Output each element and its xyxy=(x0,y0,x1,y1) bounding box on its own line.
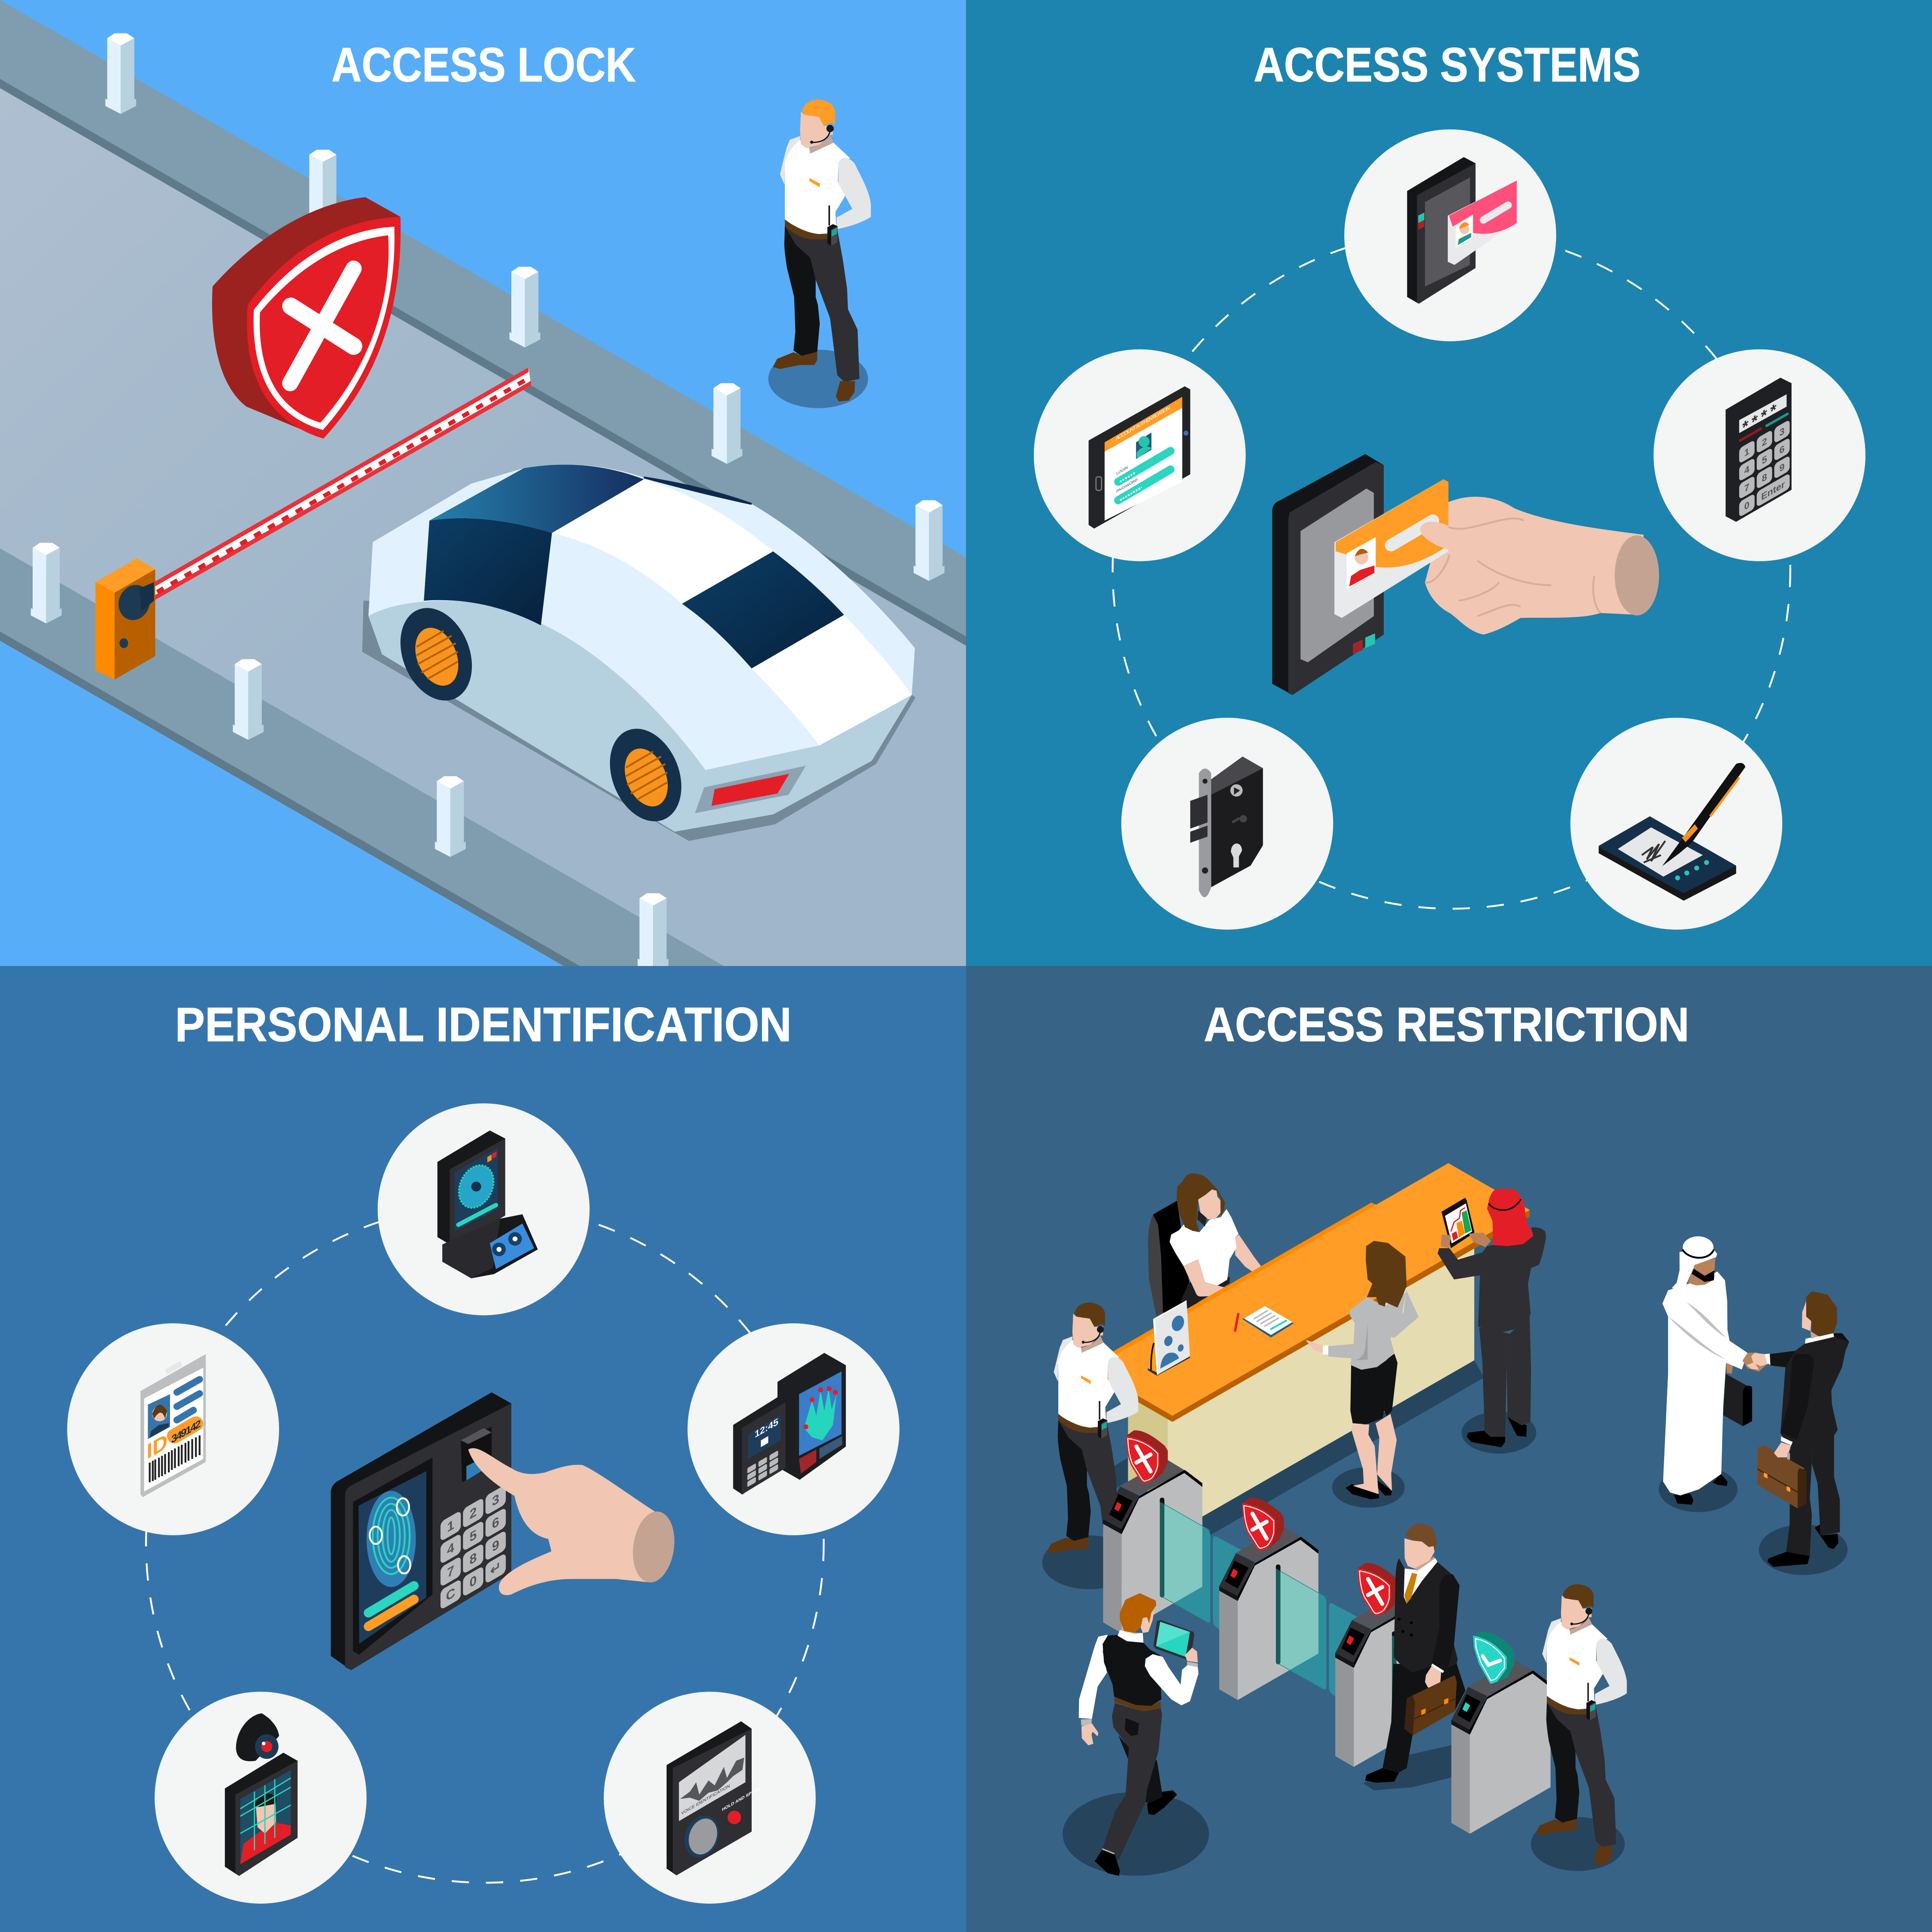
circle: tablet login xyxy=(1034,349,1245,561)
wheels xyxy=(387,597,695,832)
center fingerprint terminal with hand: 1 xyxy=(447,1517,454,1535)
man with briefcase xyxy=(1364,1524,1465,1790)
circle: voice recognition: VOICE IDENTIFICATION xyxy=(681,1783,730,1816)
circle: tablet login: PASSWORD xyxy=(1116,477,1138,494)
receptionist xyxy=(1148,1173,1264,1316)
man with tablet xyxy=(1063,1593,1209,1876)
circle: keypad: **** xyxy=(1742,398,1780,437)
turnstile 4 with green shield xyxy=(1451,1631,1550,1834)
circle: hand scanner: 12:45 xyxy=(755,1416,778,1440)
center fingerprint terminal with hand xyxy=(331,1392,679,1670)
panel: access lock xyxy=(0,0,966,974)
turnstile 1 xyxy=(1103,1459,1210,1633)
circle: door lock xyxy=(1121,718,1333,930)
title: ACCESS SYSTEMS xyxy=(1254,38,1640,91)
center fingerprint terminal with hand: 5 xyxy=(470,1527,477,1545)
guard xyxy=(768,100,871,408)
barrier gate xyxy=(95,367,531,680)
circle: keypad: 4 xyxy=(1744,463,1750,477)
turnstile 3 xyxy=(1329,1593,1434,1767)
circle: signature tablet xyxy=(1571,718,1782,930)
circle: id badge xyxy=(67,1323,279,1535)
title: ACCESS RESTRICTION xyxy=(1204,998,1689,1051)
circle: keypad: 5 xyxy=(1762,453,1767,466)
bollards xyxy=(31,33,945,974)
center fingerprint terminal with hand: 0 xyxy=(470,1572,477,1591)
road with kerbs xyxy=(0,0,966,966)
guard near desk xyxy=(1042,1303,1138,1589)
circle: keypad: 8 xyxy=(1762,471,1767,484)
center fingerprint terminal with hand: 4 xyxy=(447,1540,454,1558)
circle: iris scanner xyxy=(378,1103,589,1315)
shields on turnstiles xyxy=(1126,1430,1400,1616)
circle: keypad: 0 xyxy=(1744,499,1750,512)
desk sign and papers xyxy=(1148,1300,1294,1376)
center fingerprint terminal with hand: 9 xyxy=(492,1536,499,1555)
circle: keypad: 7 xyxy=(1744,481,1750,494)
circle: id badge: ID xyxy=(147,1429,167,1464)
circle: hand scanner xyxy=(687,1323,899,1535)
center reader with hand xyxy=(1272,454,1659,695)
center fingerprint terminal with hand: ↵ xyxy=(490,1558,501,1579)
car xyxy=(362,465,915,841)
circle: keypad: 9 xyxy=(1780,461,1785,474)
center fingerprint terminal with hand: C xyxy=(446,1585,456,1604)
reception desk xyxy=(1091,1163,1530,1540)
man in white robe xyxy=(1659,1236,1768,1512)
dashed ring xyxy=(1113,231,1790,909)
businessman handshake xyxy=(1757,1291,1849,1575)
icon: red shield xyxy=(212,197,401,439)
circle: face recognition xyxy=(155,1692,367,1904)
circle: keypad xyxy=(1653,349,1865,561)
center fingerprint terminal with hand: 2 xyxy=(470,1504,477,1522)
circle: id badge: 349142 xyxy=(171,1417,201,1446)
dashed ring xyxy=(146,1205,824,1883)
circle: keypad: 6 xyxy=(1780,443,1785,456)
panel: personal identification xyxy=(0,966,966,1932)
circle: voice recognition: HOLD AND SPEAK xyxy=(722,1785,761,1813)
circle: keypad: 2 xyxy=(1762,435,1767,449)
man in red headdress xyxy=(1437,1189,1546,1454)
circle: voice recognition xyxy=(604,1692,816,1904)
circle: card reader xyxy=(1344,129,1556,341)
circle: keypad: 1 xyxy=(1744,445,1750,459)
center fingerprint terminal with hand: 6 xyxy=(492,1513,499,1532)
title: PERSONAL IDENTIFICATION xyxy=(175,998,792,1051)
guard front xyxy=(1531,1584,1627,1871)
turnstile 2 xyxy=(1213,1526,1326,1700)
title: ACCESS LOCK xyxy=(331,38,636,91)
circle: tablet login: LOGIN xyxy=(1116,465,1128,476)
panel: access restriction xyxy=(966,966,1932,1932)
center fingerprint terminal with hand: 3 xyxy=(492,1491,499,1509)
woman visitor xyxy=(1306,1241,1419,1508)
circle: keypad: Enter xyxy=(1761,478,1785,502)
panel: access systems xyxy=(966,0,1932,966)
circle: tablet login: ACCOUNT AUTHENTICATION xyxy=(1116,405,1170,442)
circle: keypad: 3 xyxy=(1780,425,1785,438)
center fingerprint terminal with hand: 8 xyxy=(470,1549,477,1568)
center fingerprint terminal with hand: 7 xyxy=(447,1562,454,1581)
